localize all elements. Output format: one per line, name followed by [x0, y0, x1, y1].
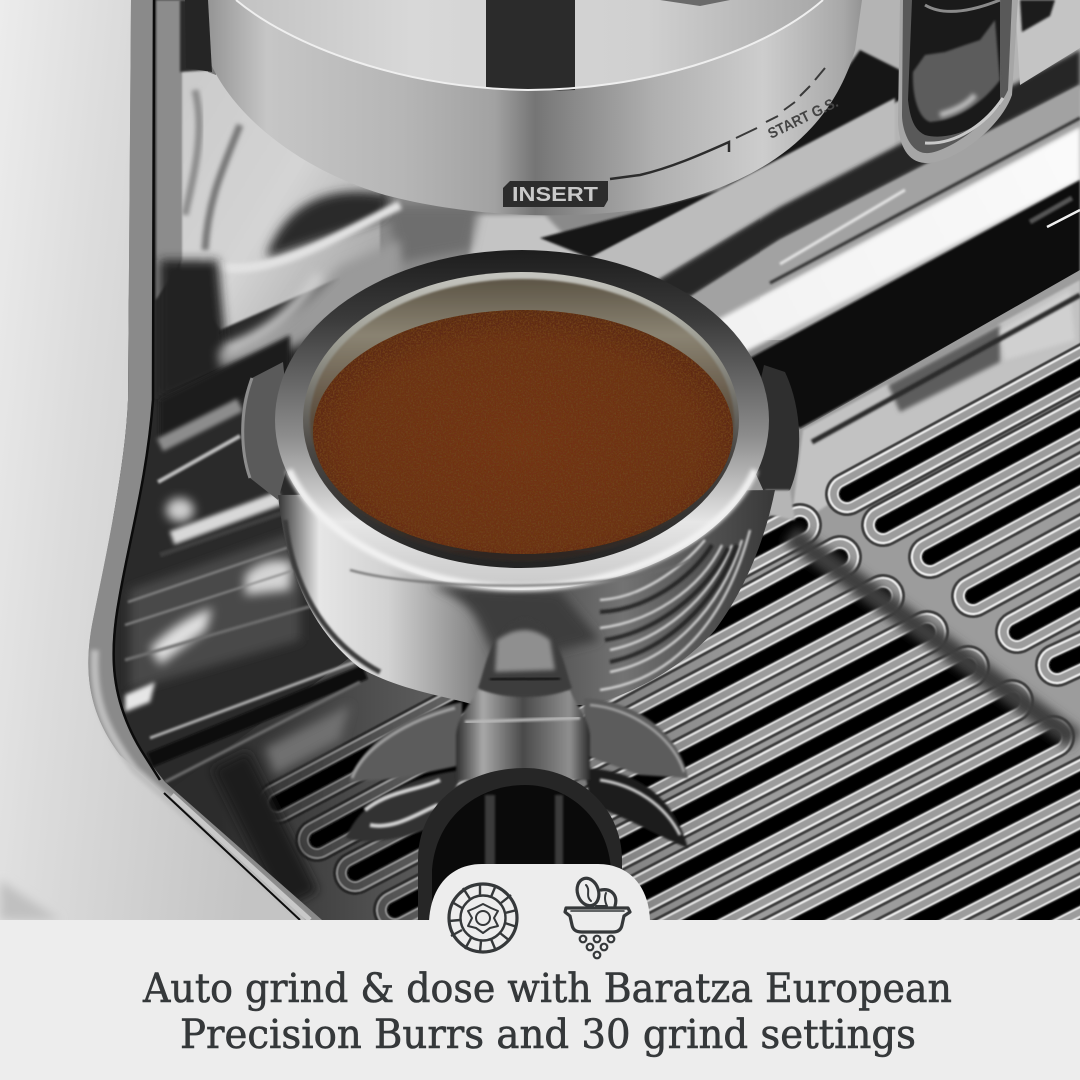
left wing — [349, 702, 462, 782]
portafilter spout — [346, 617, 688, 920]
portafilter bowl — [278, 490, 775, 705]
portafilter with ground coffee — [241, 250, 799, 705]
upper right steel rails — [385, 0, 1080, 428]
label: insert — [503, 181, 608, 207]
grinder cradle with brushed band — [185, 0, 862, 215]
caption text — [142, 966, 952, 1058]
machine body panel and steel trim — [0, 0, 322, 920]
basket wall — [310, 279, 734, 561]
caption text: Precision Burrs and 30 grind settings — [180, 1012, 916, 1058]
outer rim — [275, 250, 769, 590]
neck dome — [478, 644, 572, 698]
right wing — [584, 698, 688, 778]
portafilter ears — [241, 362, 799, 520]
label: insert: INSERT — [512, 184, 598, 206]
oval inspection window — [898, 0, 1018, 163]
ground coffee surface — [313, 310, 733, 554]
icon: burr grinder disc — [449, 884, 517, 952]
label: start: START G.S. — [765, 94, 841, 143]
caption panel with icon tab — [0, 864, 1080, 1080]
bowl reflections — [600, 530, 750, 690]
left reflective channel — [100, 0, 400, 790]
drip tray grate with slots — [172, 270, 1080, 920]
black ring and spout opening — [418, 768, 622, 920]
inner rim — [303, 272, 739, 568]
icon: beans in portafilter basket with grounds — [565, 875, 630, 958]
collar — [456, 690, 590, 780]
slot ribs — [263, 342, 1080, 920]
caption text: Auto grind & dose with Baratza European — [142, 966, 952, 1012]
